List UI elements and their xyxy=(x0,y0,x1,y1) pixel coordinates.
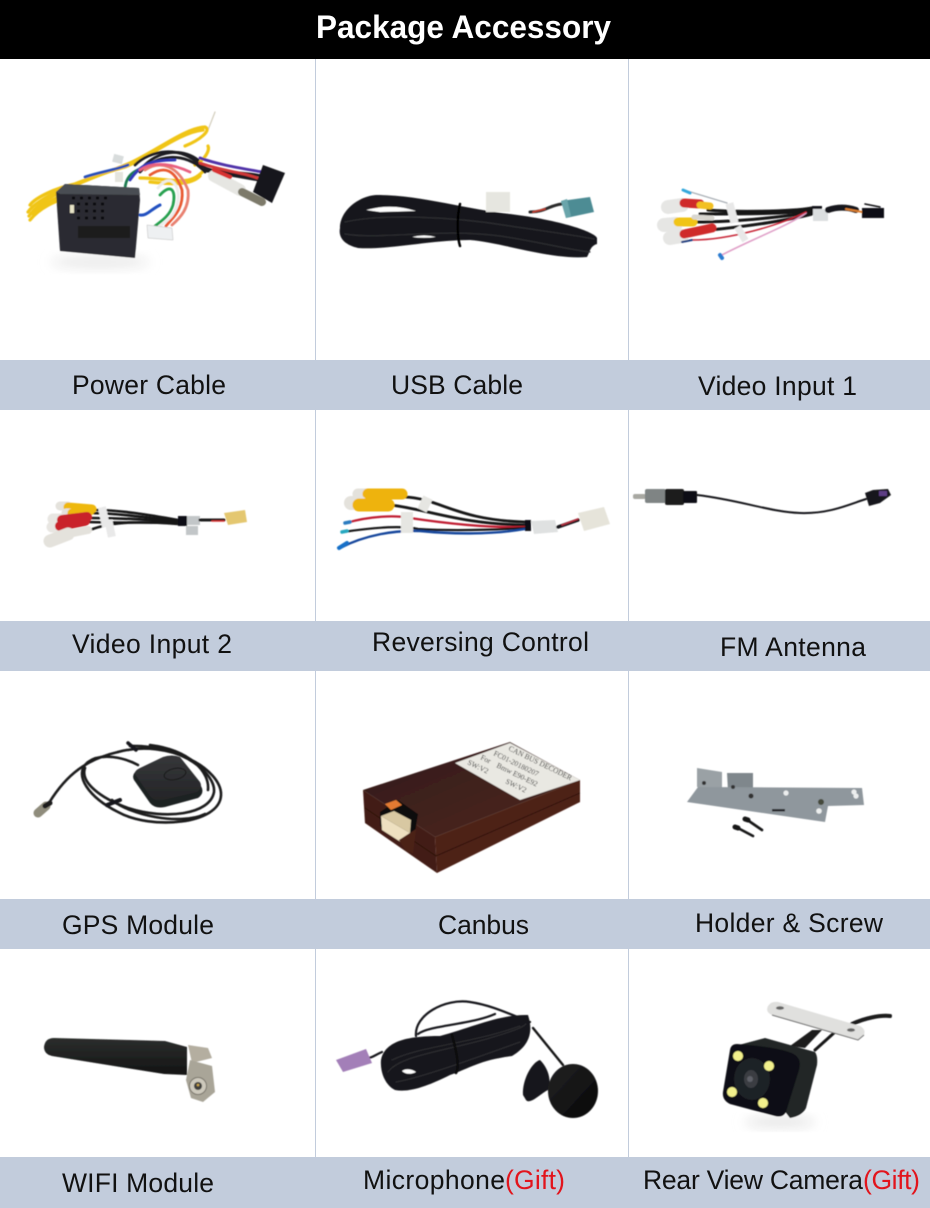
photo: reversing control xyxy=(339,494,610,548)
photo: WIFI module antenna xyxy=(44,1038,215,1102)
photo: video input 1 xyxy=(664,190,884,258)
title xyxy=(0,0,930,59)
photo: USB cable xyxy=(340,192,597,257)
row 3 caption band xyxy=(0,899,930,949)
row 2 caption band: FM Antenna xyxy=(720,632,866,662)
photo: GPS module xyxy=(38,743,221,822)
photo: power cable harness xyxy=(28,112,285,268)
row 1 caption band: USB Cable xyxy=(391,370,523,400)
photo: microphone xyxy=(336,1001,598,1118)
photo: canbus decoder box xyxy=(363,742,580,873)
row 4 caption band: (Gift) xyxy=(863,1165,920,1195)
photo: video input 2 xyxy=(50,506,247,541)
row 1 caption band xyxy=(0,360,930,410)
row 4 caption band: (Gift) xyxy=(505,1165,565,1195)
decoder sticker label: For xyxy=(479,753,493,766)
row 1 caption band: Video Input 1 xyxy=(698,371,857,401)
row 2 caption band xyxy=(0,621,930,671)
decoder sticker label: FC01-20180207 xyxy=(492,749,540,778)
row 3 caption band: Canbus xyxy=(438,910,529,940)
row 2 caption band: Video Input 2 xyxy=(72,629,232,659)
row 3 caption band: GPS Module xyxy=(62,910,214,940)
photo: holder and screw xyxy=(687,768,864,836)
photo: rear view camera xyxy=(723,1002,890,1127)
row 2 caption band: Reversing Control xyxy=(372,627,589,657)
decoder sticker label xyxy=(455,743,580,800)
row 4 caption band xyxy=(0,1157,930,1208)
row 4 caption band: Microphone xyxy=(363,1165,505,1195)
row 1 caption band: Power Cable xyxy=(72,370,226,400)
photo: FM antenna xyxy=(633,489,891,513)
row 3 caption band: Holder & Screw xyxy=(695,908,884,938)
decoder sticker label: SW:V2 xyxy=(466,758,490,776)
decoder sticker label: Bmw E90-E92 xyxy=(495,761,540,789)
row 4 caption band: Rear View Camera xyxy=(643,1165,863,1195)
row 4 caption band: WIFI Module xyxy=(62,1168,214,1198)
decoder sticker label: SW:V2 xyxy=(504,777,528,795)
title: Package Accessory xyxy=(316,9,611,45)
decoder sticker label: CAN BUS DECODER xyxy=(507,744,574,782)
